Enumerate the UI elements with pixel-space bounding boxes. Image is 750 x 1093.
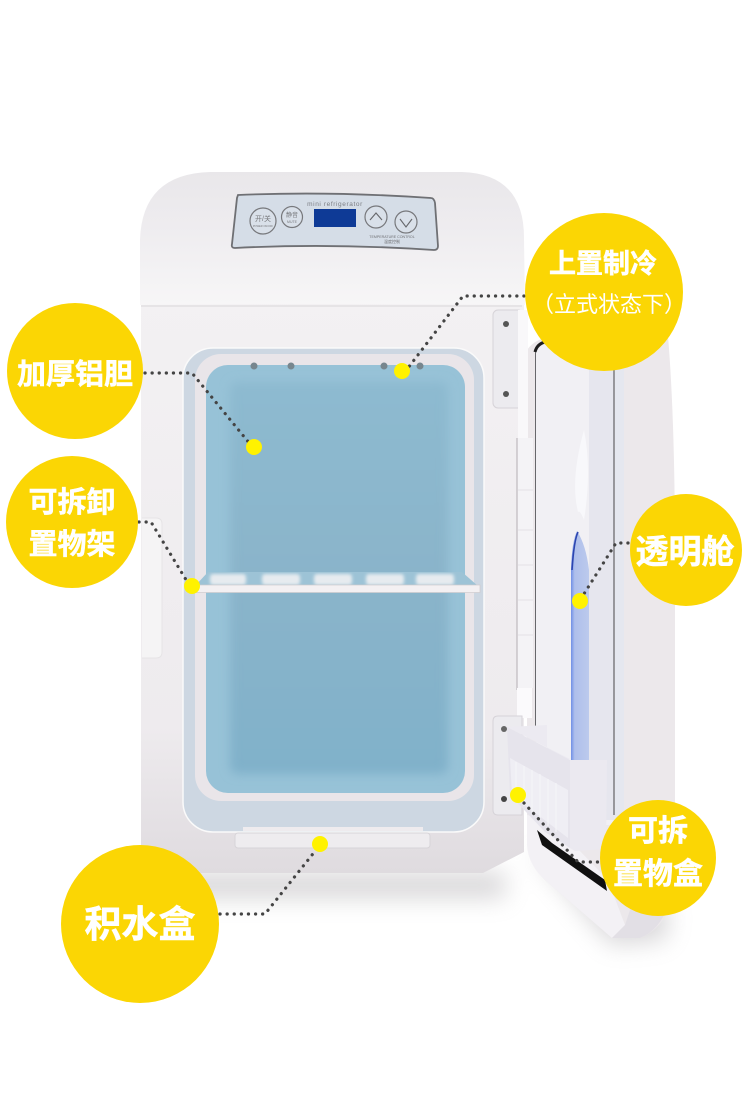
- button power: [250, 208, 276, 234]
- hinge strip: [518, 310, 528, 438]
- fridge body: [6, 172, 742, 1003]
- door bottom tray: [527, 815, 625, 938]
- cavity: [183, 348, 484, 848]
- button power: POWER ON/OFF: [253, 224, 274, 228]
- callout: transparent compartment: 透明舱: [636, 533, 734, 570]
- callout: removable shelf: 可拆卸: [28, 486, 116, 519]
- button mute: MUTE: [287, 220, 298, 224]
- door inner panel: [536, 345, 614, 825]
- door storage box: [507, 725, 607, 851]
- callout: transparent compartment: [630, 494, 742, 606]
- temperature label: TEMPERATURE CONTROL: [369, 235, 415, 239]
- callout: top refrigeration: [525, 213, 686, 371]
- fridge shadow: [175, 850, 670, 945]
- panel title: mini refrigerator: [307, 201, 363, 208]
- left handle: [142, 518, 162, 658]
- button power: 开/关: [255, 214, 271, 223]
- drip tray slot: [235, 833, 430, 848]
- button down: [395, 211, 417, 233]
- temperature label: 温度控制: [384, 238, 400, 244]
- callout: top refrigeration: （立式状态下）: [532, 292, 686, 317]
- callout: removable storage box: 置物盒: [613, 858, 703, 891]
- temperature label: [369, 235, 415, 244]
- callout: top refrigeration: 上置制冷: [549, 249, 657, 279]
- callout: removable storage box: [600, 800, 716, 916]
- box back wall: [507, 725, 570, 759]
- callout: removable shelf: [6, 456, 138, 588]
- button up: [365, 206, 387, 228]
- hinge bottom: [493, 716, 522, 815]
- icon: blue transparent compartment: [571, 531, 589, 760]
- inner frame: [195, 354, 474, 801]
- control panel: [232, 194, 438, 250]
- marker dots: [184, 363, 588, 852]
- button mute: 静音: [286, 211, 298, 219]
- shelf: [190, 572, 480, 592]
- blue liner: [206, 365, 465, 793]
- callout: thick aluminium liner: 加厚铝胆: [17, 358, 133, 391]
- top cap: [140, 172, 525, 305]
- button mute: [282, 206, 302, 228]
- callout: removable storage box: 可拆: [628, 815, 688, 848]
- box side face: [570, 760, 607, 851]
- callout: thick aluminium liner: [7, 303, 143, 439]
- leader lines: [139, 296, 628, 914]
- callout: water tray: 积水盒: [84, 904, 196, 945]
- callout: removable shelf: 置物架: [28, 528, 116, 561]
- LCD display: [314, 209, 356, 227]
- open door: [527, 336, 675, 938]
- callout: water tray: [61, 845, 219, 1003]
- hinge top: [493, 310, 523, 408]
- box front face: [507, 727, 570, 848]
